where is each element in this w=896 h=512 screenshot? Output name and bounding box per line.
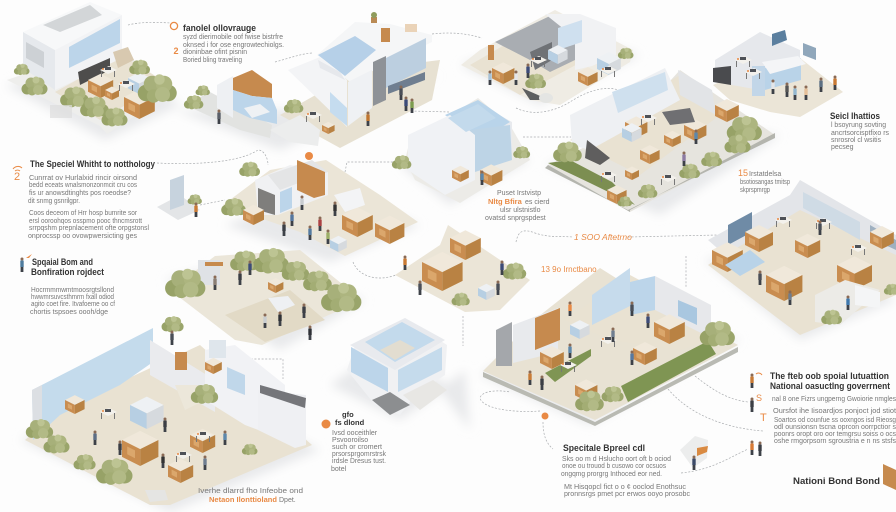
text block: Spqaial Bom and: hwwmrsuvcsthmrm fxall odiod (31, 294, 114, 301)
label: 1 SOO Aftetrno: 1 SOO Aftetrno (574, 232, 632, 242)
text block: gfo fs dlond: Psvooroilso (332, 437, 368, 444)
text block: Spqaial Bom and: Hocrmmmwmtmoosrgtsllond (31, 287, 114, 294)
text block: The Special Whitht: 2 (14, 171, 20, 183)
text block: fanolel ollovrauge: fanolel ollovrauge (183, 23, 256, 33)
text block: Spqaial Bom and: Spqaial Bom and (32, 257, 93, 268)
building 6: centre blue glass unit (392, 98, 530, 203)
label: 13 9o Irnctbano: 13 9o Irnctbano (541, 265, 597, 274)
callout: Nltg Bfira: ulsr ulstnistlo (500, 207, 541, 214)
building 3: top centre grey office (461, 10, 634, 105)
text block: National government (750, 371, 896, 445)
kiosk icon (157, 175, 202, 220)
text block: Specitale Bpreel cdl: Mt Hisqopcl fict o o ¢ ooclod Enothsuc (564, 484, 687, 491)
text block: gfo fs dlond: prsorsprgomrstrsk (332, 451, 386, 458)
text block: Spqaial Bom and: agito coet fire. Itvafoeme oo cf (31, 301, 115, 308)
building 13: right open-plan office (708, 180, 896, 335)
text block: Specitale Bpreel cdl: ongqmg prorgrg Inthoced eor ned. (561, 471, 662, 478)
text block: Spqaial Bom and (20, 254, 115, 316)
callout: 15: bsotiosangas tmitsp (740, 179, 790, 186)
caption: Netaon Ilonttioland: Netaon Ilonttioland (209, 495, 277, 504)
caption: Netaon Ilonttioland (198, 488, 303, 504)
text block: gfo fs dlond: Ivsd ooceithler (332, 430, 378, 437)
text block: The Special Whitht: bedd eceats wnalsmonzonmcit cru cos (29, 182, 137, 189)
text block: fanolel ollovrauge (170, 22, 284, 64)
wooden cabinet, lower right (883, 464, 896, 490)
text block: Specitale Bpreel cdl: onoe ou trouod b cusowo cor ocsuos (562, 463, 666, 470)
building 7: left centre workspace with people (221, 152, 418, 256)
text block: Seicl Ihattios: l bsoyrung sovting (831, 122, 886, 129)
text block: gfo fs dlond: such or cromert (332, 444, 382, 451)
text block: The Special Whitht: ersl ooroohqos osspmo pooc thncmsrott (29, 218, 142, 225)
text block: gfo fs dlond: botel (331, 466, 347, 473)
text block: National government: Oursfot ihe Iisoardjos ponjoct jod stiot (773, 408, 896, 415)
text block: gfo fs dlond (322, 410, 386, 473)
callout: Nltg Bfira: Puset Irstvistp (497, 190, 541, 197)
callout: Nltg Bfira (485, 190, 550, 222)
building 4: top right lab (713, 30, 843, 117)
caption: Netaon Ilonttioland: Iverhe dlarrd fho Infeobe ond (198, 488, 303, 495)
building 12: bottom centre-right office with lawn (483, 268, 738, 426)
text block: Spqaial Bom and: chortis tspsoes oooh/dge (30, 309, 108, 316)
building 9: garden court (165, 248, 362, 345)
text block: National government: odl ounsionsn tscna oprcon oorrpctior s (774, 424, 896, 431)
text block: The Special Whitht: srrpqshm prepnlacement ofte orpgstonsl (29, 225, 149, 232)
text block: The Special Whitht: Cunrrat ov Hurlalxid rincir oirsond (29, 175, 137, 182)
text block: Specitale Bpreel cdl (542, 412, 690, 498)
text block: National government: oshe rmgorpsorn sgroustria e n ns stsfs (774, 438, 896, 445)
text block: gfo fs dlond: fs dlond (335, 418, 365, 427)
text block: fanolel ollovrauge: oknsed i for ose engrowtechiolgs. (183, 42, 284, 49)
building 8: wooden desk area (395, 225, 530, 312)
text block: Spqaial Bom and: Bonfiration rojdect (31, 267, 105, 278)
text block: The Special Whitht: The Speciel Whitht to notthology (30, 159, 156, 170)
text block: The Special Whitht (13, 159, 156, 240)
text block: The Special Whitht: fis ur anowsdtinghts pos roeodse? (29, 190, 131, 197)
callout: Nltg Bfira: ovatsd snprgspdest (485, 215, 546, 222)
building 11: small glass cube (347, 318, 447, 415)
text block: Specitale Bpreel cdl: Sks oo m d Hslucho oort oft b ociod (562, 456, 671, 463)
text block: gfo fs dlond: gfo (342, 410, 354, 419)
text block: Seicl Ihattios: Seicl Ihattios (830, 111, 880, 122)
text block: Specitale Bpreel cdl: Specitale Bpreel cdl (563, 443, 645, 453)
connector lines (128, 22, 763, 473)
callout: Nltg Bfira: es cierd (525, 199, 550, 206)
text block: Seicl Ihattios: snrosrol cl wsitis (831, 137, 881, 144)
text block: gfo fs dlond: irdsle Dresus tust. (332, 458, 386, 465)
text block: The Special Whitht: dit snmg gsnrilgpr. (28, 198, 80, 205)
callout: 15: skprspmrgp (740, 187, 770, 194)
text block: National government: S (756, 393, 762, 403)
text block: fanolel ollovrauge: dioninbae ofint pisnin (183, 49, 247, 56)
building 10: bottom-left large office (25, 316, 312, 505)
text block: Seicl Ihattios: ancrtsorcisptfixo rs (831, 130, 889, 137)
building 5: central large studio with hedge (545, 68, 775, 212)
text block: The Special Whitht: onprocssp oo ovowpwersicting ges (28, 233, 137, 240)
callout: Nltg Bfira: Nltg Bfira (488, 197, 523, 206)
building 1: top-left office (7, 2, 177, 134)
label: Nationi Bond Bond: Nationi Bond Bond (793, 476, 880, 486)
caption: Netaon Ilonttioland: Dpet. (279, 497, 296, 504)
text block: National government: T (760, 412, 767, 424)
building 2: small unit and large white building (184, 12, 440, 148)
text block: Seicl Ihattios: pecseg (831, 144, 854, 151)
text block: fanolel ollovrauge: 2 (173, 46, 179, 56)
text block: Specitale Bpreel cdl: pronnsrgs pmet pcr erwos ooyo prosobc (564, 491, 690, 498)
callout: 15: 15 (738, 168, 748, 178)
text block: fanolel ollovrauge: syzd dierimobile oof fwise bistrfre (183, 34, 283, 41)
callout: 15 (738, 168, 790, 194)
callout: 15: Irstatdelsa (749, 171, 781, 178)
text block: The Special Whitht: Coos deceom of Hrr hosp bumrite sor (29, 210, 138, 217)
text block: fanolel ollovrauge: Boried bling traveling (183, 57, 242, 64)
small box with figures (680, 436, 762, 470)
text block: Seicl Ihattios (830, 111, 889, 151)
